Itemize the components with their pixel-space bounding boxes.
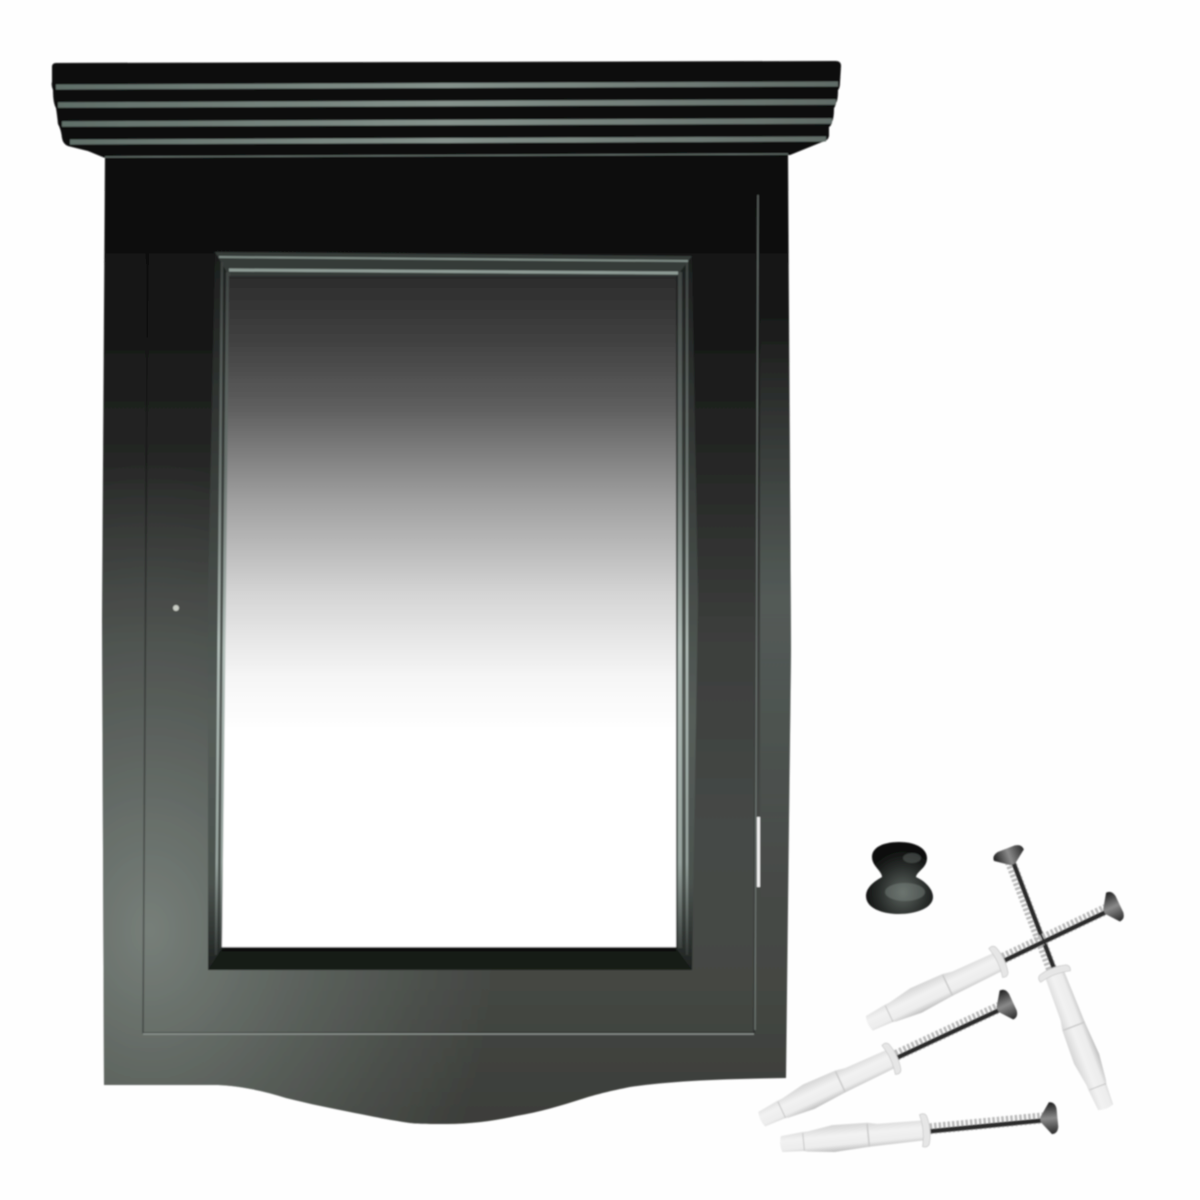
hinge xyxy=(757,817,760,887)
crown moulding xyxy=(52,61,841,158)
screw and wall anchor 1 xyxy=(991,843,1122,1115)
screw and wall anchor 4 xyxy=(779,1101,1059,1161)
door panel outline xyxy=(143,188,758,1033)
knob xyxy=(866,842,933,914)
door panel lower highlight xyxy=(143,1033,754,1035)
raised mirror frame xyxy=(208,252,698,970)
mounting hardware xyxy=(753,842,1127,1161)
screw and wall anchor 3 xyxy=(753,987,1020,1135)
mirror xyxy=(222,276,676,947)
screw and wall anchor 2 xyxy=(861,889,1127,1039)
door knob hole xyxy=(173,605,179,611)
door panel right highlight xyxy=(755,195,758,1030)
cabinet xyxy=(52,61,841,1130)
cabinet body with scalloped base xyxy=(100,150,795,1130)
